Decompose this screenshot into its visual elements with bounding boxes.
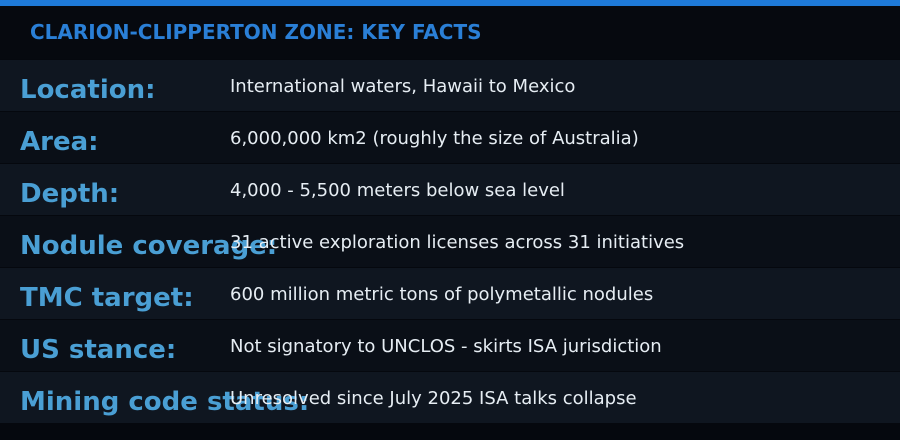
row: TMC target: TMC target:	[20, 283, 194, 313]
row: depth: Depth:	[20, 179, 119, 209]
row: TMC target	[0, 268, 900, 319]
row: location: International waters, Hawaii to Mexico	[230, 76, 575, 97]
row: mining code status: Mining code status:	[20, 387, 309, 417]
row: mining code status	[0, 372, 900, 423]
row: nodule coverage: Nodule coverage:	[20, 231, 277, 261]
row: US stance: US stance:	[20, 335, 176, 365]
row: nodule coverage: 31 active exploration licenses across 31 initiatives	[230, 232, 684, 253]
row: area: Area:	[20, 127, 99, 157]
title: CLARION-CLIPPERTON ZONE: KEY FACTS	[30, 20, 482, 44]
row: depth: 4,000 - 5,500 meters below sea level	[230, 180, 565, 201]
row: US stance	[0, 320, 900, 371]
row: nodule coverage	[0, 216, 900, 267]
row: US stance: Not signatory to UNCLOS - skirts ISA jurisdiction	[230, 336, 662, 357]
row: TMC target: 600 million metric tons of polymetallic nodules	[230, 284, 653, 305]
row: location	[0, 60, 900, 111]
row: location: Location:	[20, 75, 156, 105]
row: mining code status: Unresolved since July 2025 ISA talks collapse	[230, 388, 637, 409]
row: area: 6,000,000 km2 (roughly the size of Australia)	[230, 128, 639, 149]
header	[0, 6, 900, 59]
row: depth	[0, 164, 900, 215]
row: area	[0, 112, 900, 163]
